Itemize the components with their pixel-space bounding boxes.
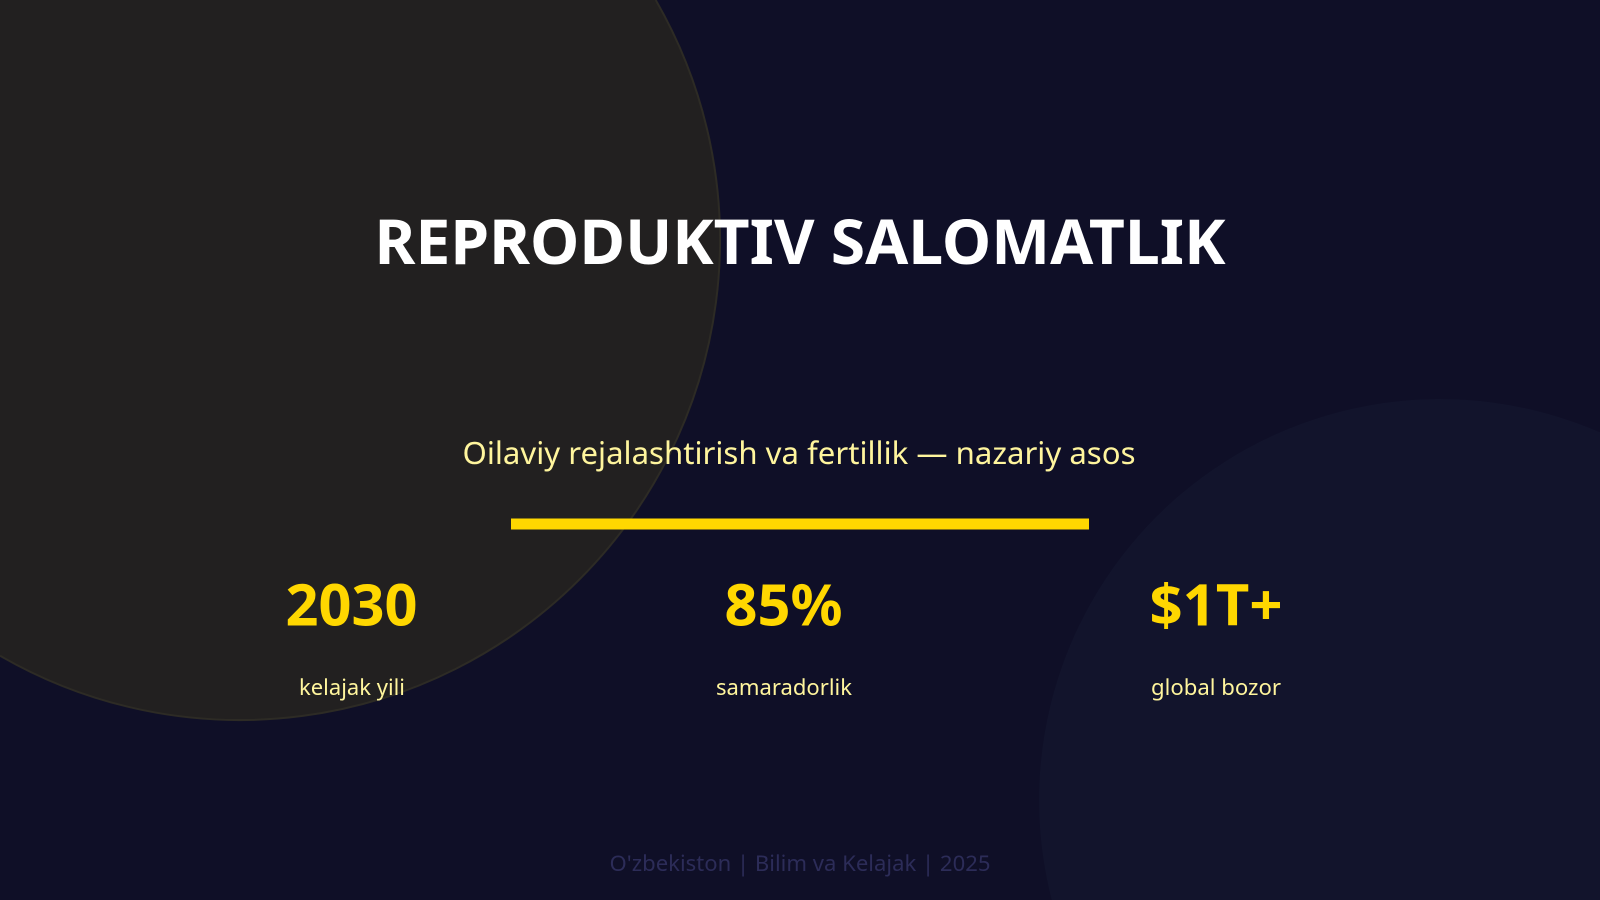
stat: 2030: [286, 564, 418, 702]
stat value: $1T+: [1150, 564, 1282, 642]
stat label: samaradorlik: [716, 672, 852, 702]
footer: O'zbekiston | Bilim va Kelajak | 2025: [610, 848, 990, 878]
stat label: global bozor: [1151, 672, 1281, 702]
stat value: 85%: [724, 564, 842, 642]
stat label: kelajak yili: [299, 672, 405, 702]
subtitle: Oilaviy rejalashtirish va fertillik — nazariy asos: [462, 432, 1136, 474]
divider bar: [511, 518, 1089, 530]
stat: 85%: [716, 564, 852, 702]
decorative circle: top left: [0, 0, 720, 720]
stat: $1T+: [1150, 564, 1282, 702]
title: REPRODUKTIV SALOMATLIK: [374, 199, 1226, 283]
stat value: 2030: [286, 564, 418, 642]
decorative circle: bottom right: [1039, 399, 1600, 900]
